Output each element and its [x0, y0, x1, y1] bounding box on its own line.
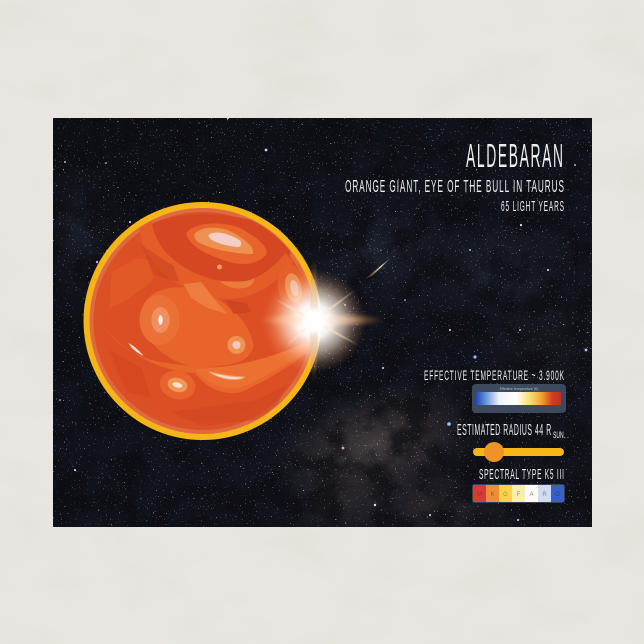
spectral type bar: R: [542, 492, 547, 498]
orange giant star: [84, 202, 322, 440]
left storm: [140, 295, 180, 345]
spectral type label: SPECTRAL TYPE K5 III: [479, 467, 564, 483]
lens flare: [258, 258, 391, 382]
title: ALDEBARAN: [466, 138, 563, 175]
spectral type bar: F: [517, 492, 521, 498]
swirl band: [140, 218, 294, 299]
dark upper swirl: [152, 214, 290, 258]
lower storm: [160, 370, 196, 400]
spectral type bar: K: [490, 492, 495, 498]
top storm: [186, 224, 267, 264]
estimated radius label: ESTIMATED RADIUS 44 R: [457, 421, 551, 439]
effective temperature label: EFFECTIVE TEMPERATURE ~ 3.900K: [424, 368, 564, 384]
spectral type bar: G: [503, 492, 508, 498]
star: surface bands and storms: [98, 214, 314, 426]
temperature scale: Effective temperature (K): [500, 387, 538, 391]
spectral type bar: A: [529, 492, 534, 498]
radius slider: [473, 442, 564, 462]
star: yellow rim: [84, 202, 322, 440]
centre storm: [222, 330, 252, 360]
spectral type bar: M: [477, 492, 482, 498]
star: orange body: [90, 208, 316, 434]
estimated radius label: SUN.: [553, 430, 565, 440]
starfield: [53, 118, 592, 527]
central bright area: [142, 287, 254, 366]
right storm: [278, 265, 306, 304]
subtitle: ORANGE GIANT, EYE OF THE BULL IN TAURUS: [345, 177, 564, 196]
spectral type bar: O: [555, 492, 560, 498]
spectral type bar: [472, 484, 565, 503]
lower band: [103, 326, 310, 393]
milky way nebula: [61, 198, 562, 527]
darker lower patches: [110, 350, 152, 398]
temperature scale: [472, 384, 566, 413]
distance: 65 LIGHT YEARS: [501, 199, 564, 215]
panel: night sky card: [53, 118, 592, 527]
